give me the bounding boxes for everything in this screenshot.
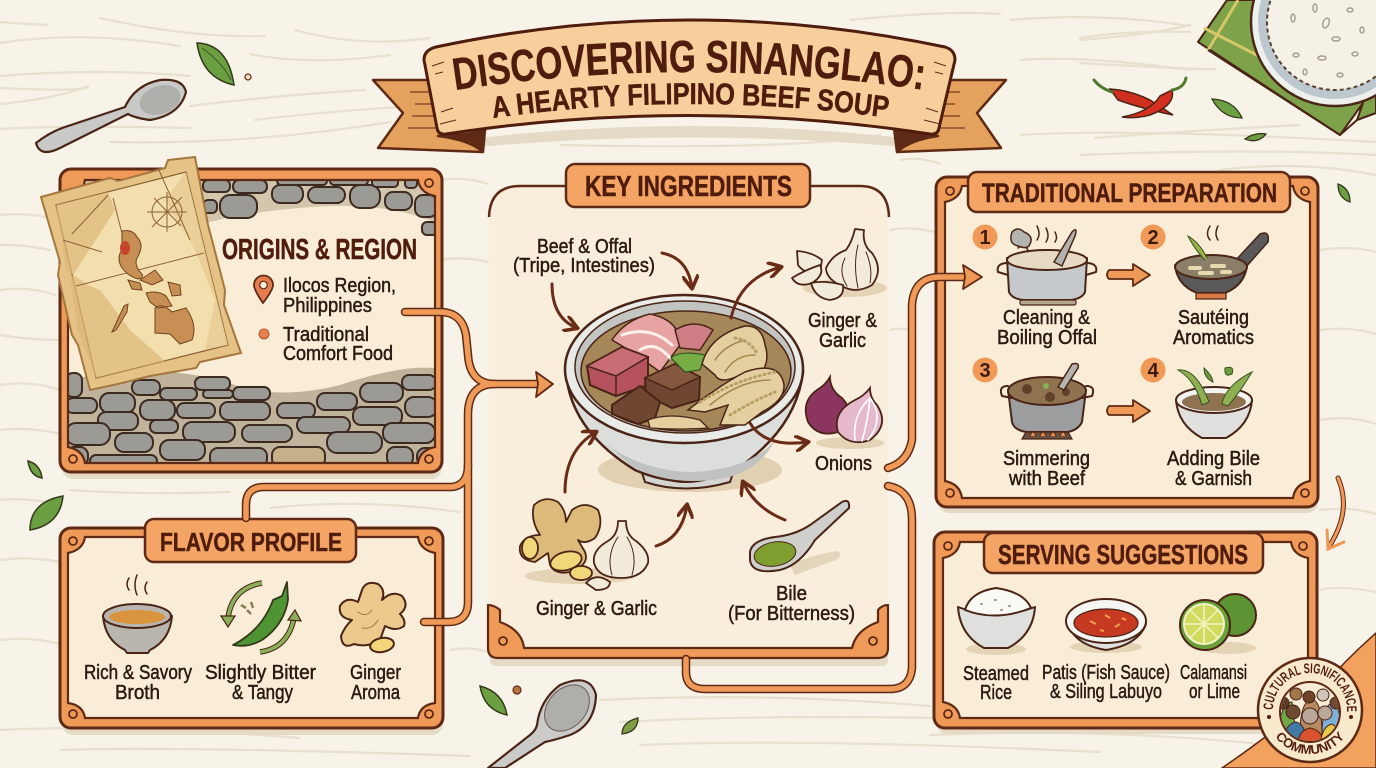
label: steamed rice: Steamed [963, 663, 1029, 685]
label [1173, 307, 1254, 349]
text: traditional comfort food: Traditional [283, 324, 369, 346]
bottom frame [488, 605, 888, 658]
label: ginger aroma: Ginger [350, 662, 401, 684]
banner end hatching [432, 62, 946, 124]
text: ilocos region [283, 275, 396, 317]
icon: broth bowl [103, 575, 172, 653]
heading: traditional preparation [968, 172, 1290, 212]
heading: serving suggestions [984, 533, 1263, 573]
label [1167, 448, 1260, 490]
icon: steamed rice [958, 588, 1035, 655]
label: Simmering [1003, 448, 1090, 470]
heading: key ingredients: KEY INGREDIENTS [585, 171, 792, 203]
heading: serving suggestions: SERVING SUGGESTIONS [998, 539, 1248, 570]
label: beef and offal [513, 236, 655, 277]
icon: map pin [254, 276, 273, 303]
heading: origins: ORIGINS & REGION [222, 234, 417, 266]
tripe [702, 326, 767, 380]
label: bitter and tangy: Slightly Bitter [205, 662, 316, 684]
label: rich broth: Broth [115, 682, 160, 704]
green garnish [671, 353, 705, 372]
heading line 1: DISCOVERING SINANGLAO: [452, 40, 924, 90]
label: beef and offal: (Tripe, Intestines) [513, 255, 655, 277]
label: bile: Bile [776, 583, 807, 605]
banner title [372, 18, 1008, 154]
corner ornaments [69, 179, 433, 463]
ilocos highlight [120, 241, 130, 255]
heading line 2: A HEARTY FILIPINO BEEF SOUP [493, 83, 889, 118]
icon: bullet [259, 329, 269, 339]
arrows: ingredients to bowl [552, 253, 808, 546]
decoration: spoon top-left [36, 80, 186, 152]
arrowhead: into key ingredients [536, 372, 553, 397]
step 4 [1140, 358, 1260, 490]
step 3 [972, 358, 1093, 490]
visayas and mindanao [128, 270, 194, 344]
panel: flavor profile [60, 519, 443, 735]
label: calamansi: Calamansi [1180, 662, 1247, 684]
map of the Philippines [41, 157, 241, 390]
label: calamansi: or Lime [1189, 681, 1240, 703]
panel: serving suggestions [934, 532, 1317, 734]
label: ginger and garlic right [808, 310, 878, 352]
panel: key ingredients [488, 164, 889, 666]
label: Boiling Offal [997, 327, 1097, 349]
text: ilocos region: Philippines [283, 295, 372, 317]
badge text top: CULTURAL SIGNIFICANCE [1263, 663, 1357, 712]
step 2 [1140, 224, 1268, 349]
illustration: onions [806, 377, 884, 449]
corner: orange wedge [1222, 633, 1376, 768]
label: ginger and garlic right: Garlic [819, 330, 866, 352]
decoration: leaves left [28, 461, 63, 530]
badge text bottom: COMMUNITY [1277, 731, 1342, 754]
step 4: 4 [1147, 360, 1159, 382]
banner parchment [424, 20, 955, 134]
label: bitter and tangy: & Tangy [232, 682, 293, 704]
icon: bowl with garnish [1176, 367, 1252, 438]
label: onions: Onions [815, 453, 872, 475]
label: calamansi [1180, 662, 1247, 703]
text: ilocos region: Ilocos Region, [283, 275, 396, 297]
badge: cultural significance [1256, 656, 1364, 764]
label: steamed rice [963, 663, 1029, 704]
label: & Garnish [1175, 468, 1252, 490]
decoration: leaf top-left [197, 43, 251, 85]
label [1003, 448, 1090, 490]
arrow: step 1 to 2 [1107, 264, 1150, 286]
label: ginger and garlic right: Ginger & [808, 310, 878, 332]
label: steamed rice: Rice [980, 682, 1012, 704]
icon: calamansi [1180, 594, 1256, 654]
step 1: 1 [979, 227, 991, 249]
icon: pan [1175, 226, 1268, 299]
label [997, 307, 1097, 349]
heading: flavor profile [145, 519, 356, 562]
icon: people [1281, 688, 1339, 741]
panel: traditional preparation [936, 172, 1318, 513]
label: Sautéing [1178, 307, 1249, 329]
luzon [119, 231, 143, 279]
text: traditional comfort food: Comfort Food [283, 343, 393, 365]
label: beef and offal: Beef & Offal [537, 236, 632, 258]
icon: simmering pot [1001, 364, 1093, 439]
label: bitter and tangy [205, 662, 316, 704]
beef cubes [587, 347, 648, 396]
label: Aromatics [1173, 327, 1254, 349]
label: patis: & Siling Labuyo [1050, 681, 1162, 703]
arrow: step 3 to 4 [1107, 400, 1150, 422]
illustration: ginger and garlic bottom [520, 499, 648, 590]
decoration: green cloth and rice plate [1198, 0, 1376, 135]
decoration: small leaves right [1212, 99, 1350, 202]
decoration: spoon bottom [488, 676, 599, 768]
label: ginger aroma [350, 662, 401, 704]
label: ginger aroma: Aroma [351, 682, 401, 704]
illustration: soup bowl [565, 295, 803, 492]
label: bile [728, 583, 855, 625]
banner tails [373, 80, 1006, 152]
arrowhead: into preparation [963, 265, 982, 289]
label: patis: Patis (Fish Sauce) [1042, 662, 1170, 684]
illustration: bile spoon [750, 501, 849, 575]
decoration: leaves bottom [480, 686, 638, 734]
step 1 [972, 224, 1097, 349]
label: ginger and garlic bottom: Ginger & Garlic [536, 598, 657, 620]
label: Adding Bile [1167, 448, 1260, 470]
label: with Beef [1008, 468, 1085, 490]
label: rich broth: Rich & Savory [84, 662, 192, 684]
compass [147, 192, 187, 232]
illustration: garlic [792, 229, 887, 300]
connector arrows [246, 265, 1344, 689]
label: bile: (For Bitterness) [728, 603, 855, 625]
step 2: 2 [1147, 227, 1159, 249]
panel: origins and region [60, 169, 442, 479]
step 3: 3 [979, 360, 991, 382]
icon: ginger [340, 583, 406, 654]
icon: sauce dish [1066, 599, 1146, 653]
heading: flavor profile: FLAVOR PROFILE [160, 527, 342, 557]
pink beef [612, 314, 680, 372]
heading: key ingredients [566, 164, 810, 207]
icon: green chili with arrows [221, 582, 301, 652]
label: Cleaning & [1003, 307, 1091, 329]
label: patis [1042, 662, 1170, 703]
icon: boiling pot [998, 226, 1096, 305]
label: rich broth [84, 662, 192, 704]
text: traditional comfort food [283, 324, 393, 365]
heading: traditional preparation: TRADITIONAL PREPARATION [982, 178, 1277, 208]
decoration: red chilies [1094, 78, 1186, 118]
banner shadow [445, 126, 935, 150]
